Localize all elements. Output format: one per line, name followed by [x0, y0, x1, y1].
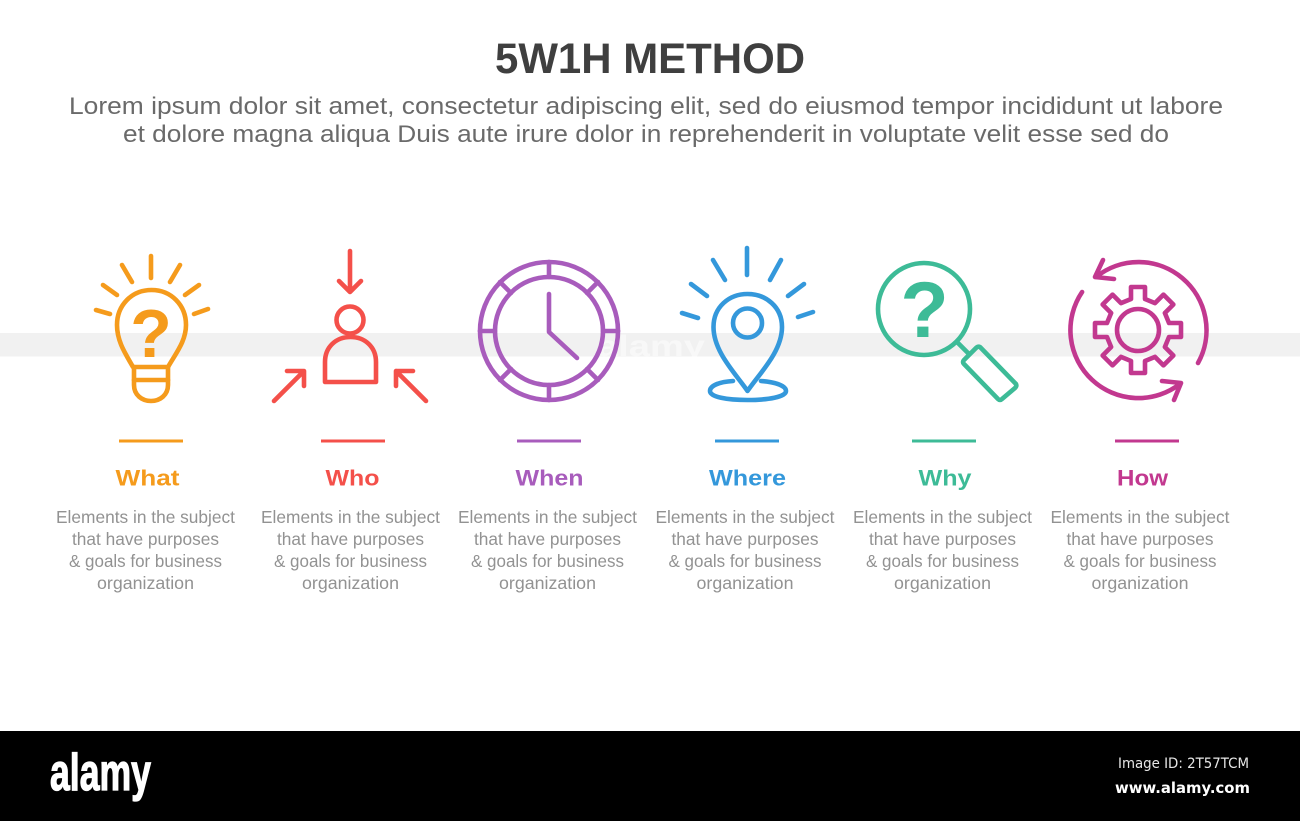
description: where: Elements in the subject — [656, 507, 835, 527]
panel: what — [56, 256, 235, 593]
description: what: & goals for business — [69, 551, 222, 571]
description: what — [56, 507, 235, 593]
description: how: & goals for business — [1064, 551, 1217, 571]
description: why: & goals for business — [866, 551, 1019, 571]
panel: where — [656, 248, 835, 593]
divider: where — [715, 440, 779, 442]
divider: how — [1115, 440, 1179, 442]
infographic canvas: alamy — [597, 330, 705, 363]
subtitle text block: et dolore magna aliqua Duis aute irure dolor in reprehenderit in voluptate velit esse sed do — [123, 121, 1169, 148]
description: why — [853, 507, 1032, 593]
label: what: What — [116, 466, 180, 490]
description: who: & goals for business — [274, 551, 427, 571]
description: what: Elements in the subject — [56, 507, 235, 527]
description: how: that have purposes — [1066, 529, 1214, 549]
description: why: Elements in the subject — [853, 507, 1032, 527]
description: who: organization — [302, 573, 399, 593]
description: when: & goals for business — [471, 551, 624, 571]
description: where: that have purposes — [672, 529, 819, 549]
description: who: that have purposes — [277, 529, 424, 549]
description: who — [261, 507, 440, 593]
label: why: Why — [918, 466, 972, 490]
subtitle text block — [69, 93, 1223, 148]
footer image id and website — [1115, 756, 1250, 797]
label: when: When — [516, 466, 584, 490]
footer image id and website: www.alamy.com — [1115, 779, 1250, 797]
icon: gear with cycle arrows — [1070, 260, 1206, 400]
subtitle text block: Lorem ipsum dolor sit amet, consectetur adipiscing elit, sed do eiusmod tempor incididunt ut labore — [69, 93, 1223, 120]
description: when: that have purposes — [474, 529, 621, 549]
panel: why — [853, 263, 1032, 593]
description: how — [1050, 507, 1230, 593]
description: where — [656, 507, 835, 593]
title: 5W1H METHOD — [495, 35, 805, 83]
icon: person with converging arrows — [274, 251, 426, 401]
icon: light bulb with question mark: ? — [130, 296, 172, 372]
description: how: Elements in the subject — [1050, 507, 1230, 527]
description: when: organization — [499, 573, 596, 593]
footer bar — [0, 731, 1300, 821]
description: who: Elements in the subject — [261, 507, 440, 527]
footer image id and website: Image ID: 2T57TCM — [1118, 756, 1249, 772]
description: when: Elements in the subject — [458, 507, 637, 527]
description: how: organization — [1092, 573, 1188, 593]
footer logo: alamy — [50, 744, 151, 802]
description: when — [458, 507, 637, 593]
icon: location pin with rays — [682, 248, 813, 400]
divider: when — [517, 440, 581, 442]
description: where: & goals for business — [668, 551, 822, 571]
label: who: Who — [326, 466, 380, 490]
divider: why — [912, 440, 976, 442]
label: where: Where — [709, 466, 786, 490]
description: why: that have purposes — [869, 529, 1016, 549]
panel: when — [458, 262, 637, 593]
label: how: How — [1117, 466, 1169, 490]
icon: magnifying glass with question mark: ? — [900, 265, 949, 354]
divider: who — [321, 440, 385, 442]
icon: light bulb with question mark — [96, 256, 208, 401]
divider: what — [119, 440, 183, 442]
description: what: organization — [97, 573, 194, 593]
icon: magnifying glass with question mark — [878, 263, 1016, 400]
panel: who — [261, 251, 440, 593]
description: why: organization — [894, 573, 991, 593]
icon: clock — [480, 262, 618, 400]
description: what: that have purposes — [72, 529, 219, 549]
panel: how — [1050, 260, 1230, 593]
description: where: organization — [696, 573, 794, 593]
